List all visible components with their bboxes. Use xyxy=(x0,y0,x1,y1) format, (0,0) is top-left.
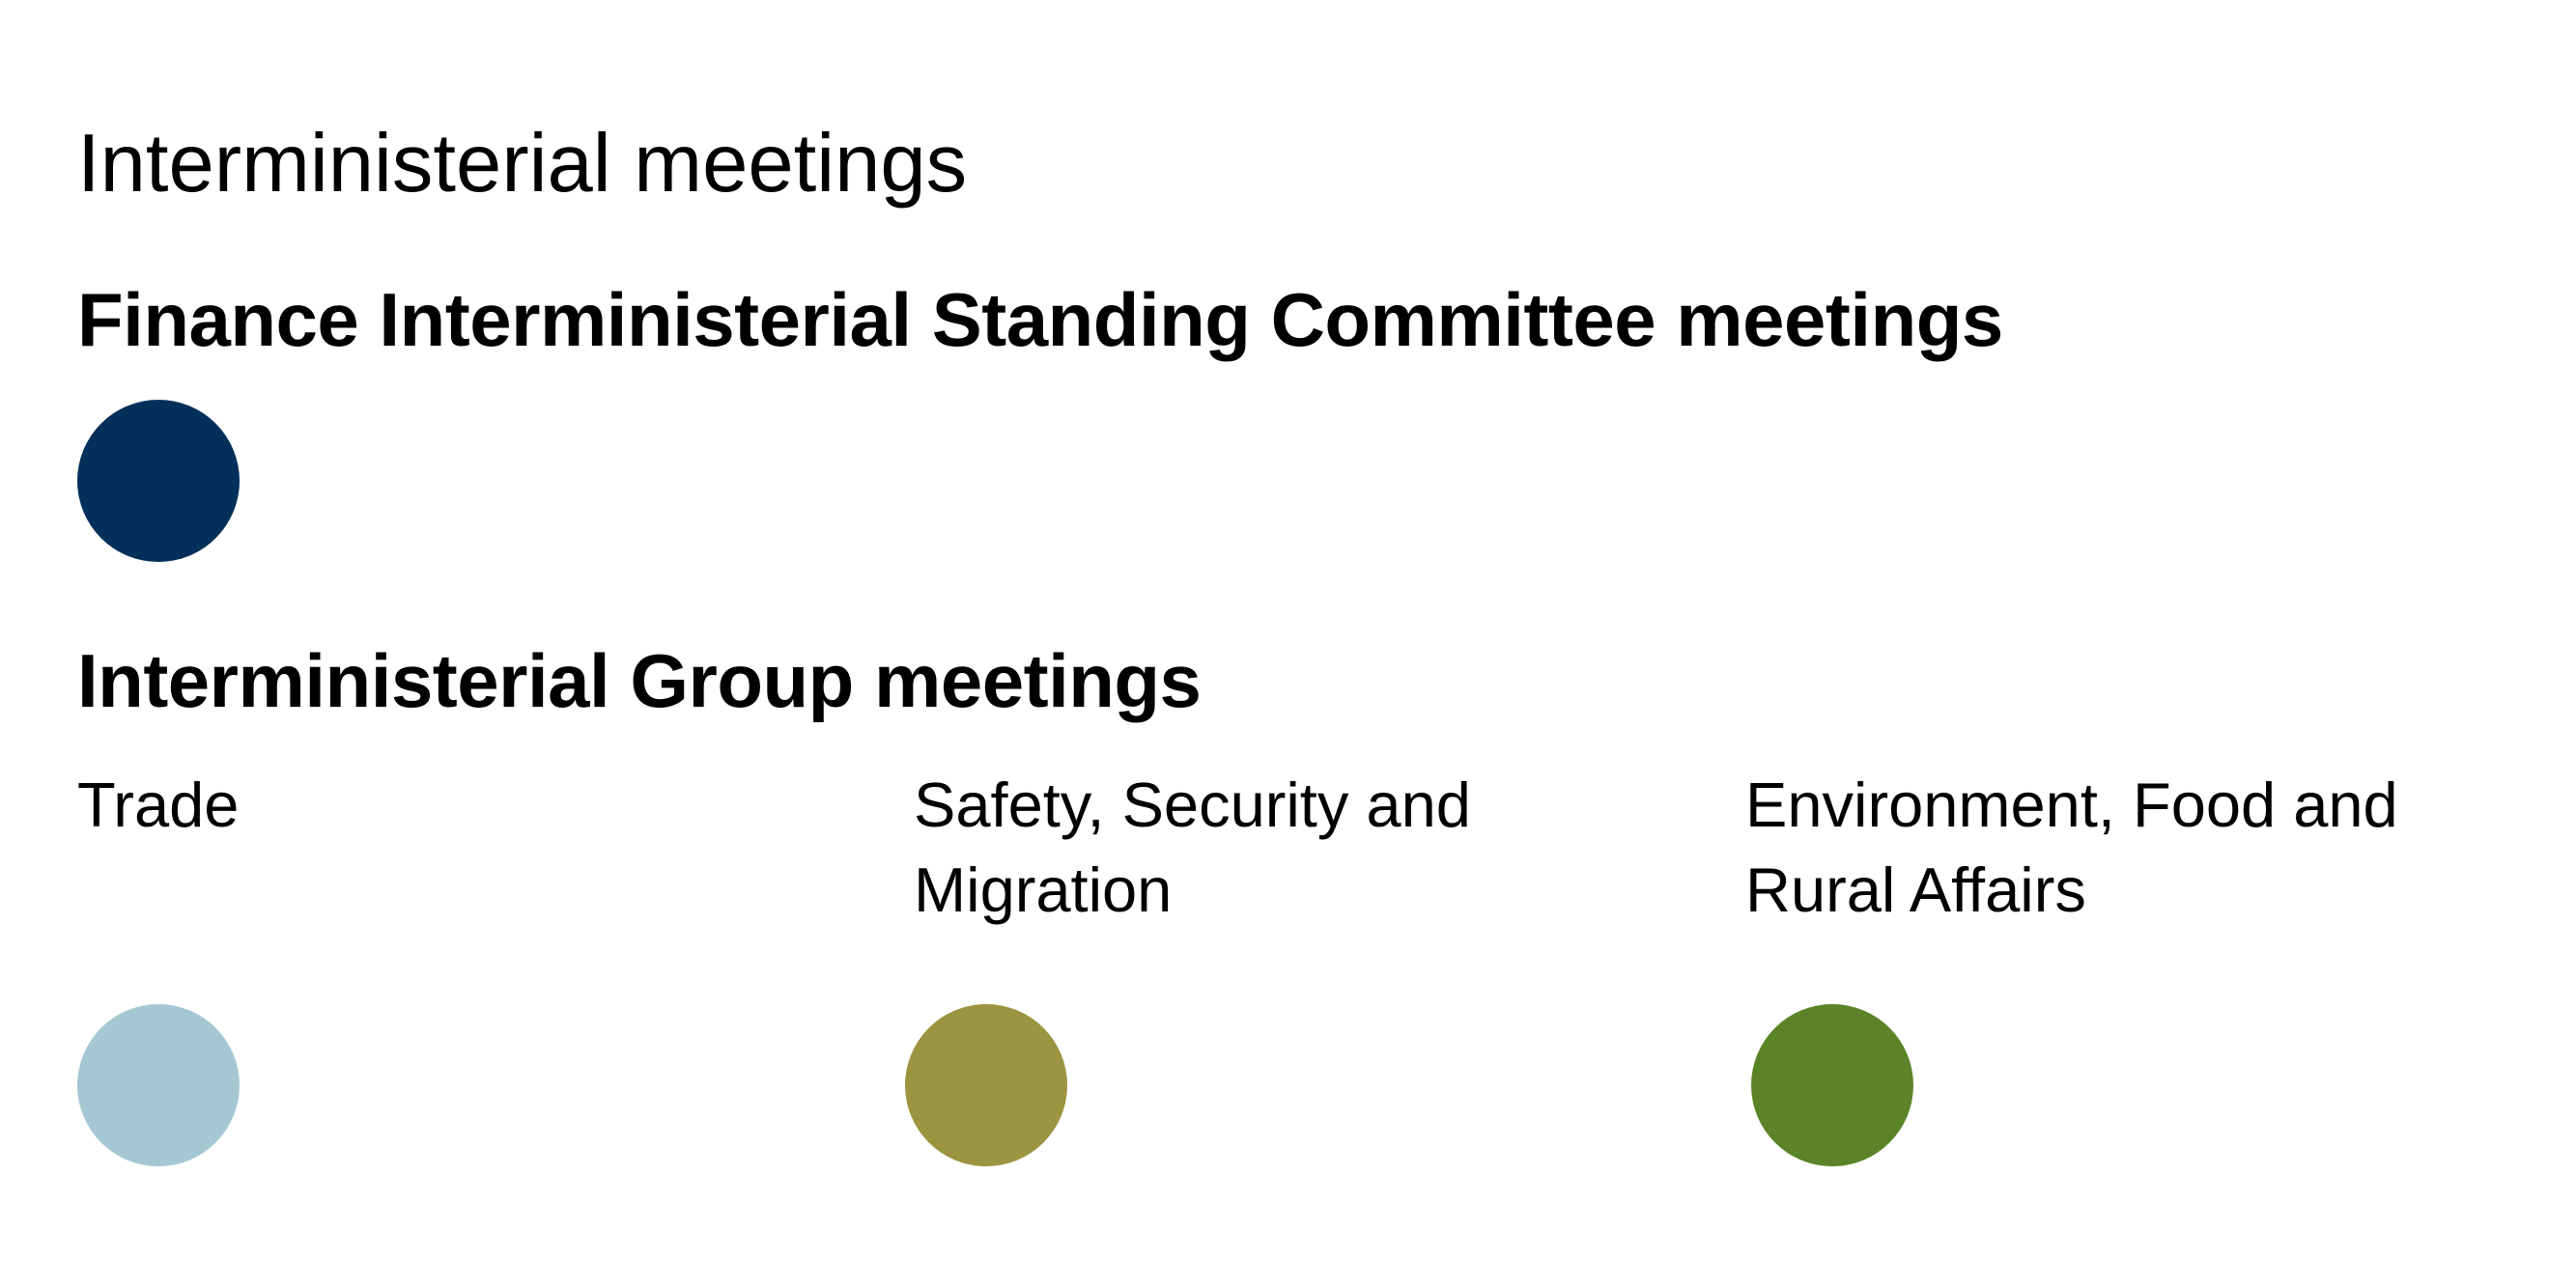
heading: finance committee: Finance Interministerial Standing Committee meetings xyxy=(77,277,2003,362)
label: environment: Rural Affairs xyxy=(1745,854,2086,925)
label: safety xyxy=(914,770,1471,925)
label: trade: Trade xyxy=(77,770,239,840)
icon: safety dot xyxy=(905,1004,1067,1166)
label: environment: Environment, Food and xyxy=(1745,770,2398,840)
label: environment xyxy=(1745,770,2398,925)
heading: group meetings: Interministerial Group meetings xyxy=(77,638,1201,723)
label: safety: Safety, Security and xyxy=(914,770,1471,840)
icon: environment dot xyxy=(1751,1004,1913,1166)
icon: finance committee dot xyxy=(77,400,240,562)
label: safety: Migration xyxy=(914,854,1172,925)
title: Interministerial meetings xyxy=(77,118,967,210)
icon: trade dot xyxy=(77,1004,240,1166)
